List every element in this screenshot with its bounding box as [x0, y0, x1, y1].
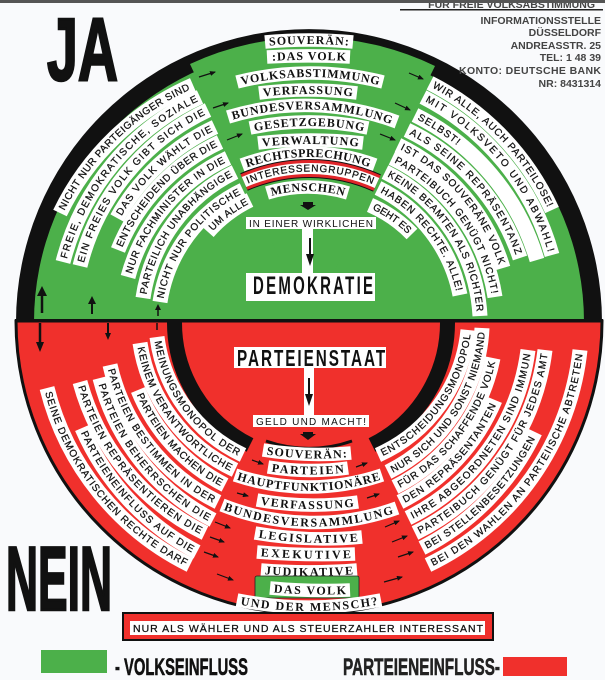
bands: green half right column: PARTEIBUCH GENÜGT NICHT!	[394, 156, 498, 294]
center stack: green half: VERWALTUNG	[262, 136, 358, 146]
arrows: red half side arrows	[204, 460, 413, 582]
center stack: green half: BUNDESVERSAMMLUNG	[231, 102, 392, 124]
arrow: white stem to Demokratie	[302, 229, 314, 273]
icon: small down marker red half	[300, 432, 316, 440]
bands: green half right column	[367, 76, 560, 316]
contact block top right: INFORMATIONSSTELLE	[480, 15, 601, 27]
arrows: green half side arrows	[199, 72, 423, 140]
bands: green half left column: ENTSCHEIDEND ÜBER DIE	[116, 140, 218, 247]
bands: red half left column: PARTEIEN REPRÄSENTIEREN DIE	[78, 385, 203, 534]
box: GELD UND MACHT: GELD UND MACHT!	[256, 417, 366, 428]
bands: green half left column: NUR FACHMINISTER IN DIE	[125, 156, 226, 274]
center stack: red half: BUNDESVERSAMMLUNG	[222, 500, 395, 530]
bands: red half right column: PARTEIBUCH GENÜGT FÜR JEDES AMT	[416, 353, 550, 536]
contact block top right: TEL: 1 48 39	[540, 52, 601, 64]
contact block top right: NR: 8431314	[539, 78, 601, 90]
center stack: green half: VERFASSUNG	[262, 86, 352, 96]
center stack: red half: JUDIKATIVE	[265, 563, 353, 579]
arrow: white stem to Geld und Macht	[304, 368, 314, 416]
bands: red half left column: SEINE DEMOKRATISCHEN RECHTE DARF	[46, 392, 188, 564]
center stack: red half	[220, 443, 400, 612]
icon: small down marker	[300, 202, 316, 210]
box: PARTEIENSTAAT: PARTEIENSTAAT	[237, 346, 385, 372]
center stack: red half: VERFASSUNG	[260, 494, 354, 512]
center stack: red half: DAS VOLK	[273, 581, 347, 598]
center stack: green half: RECHTSPRECHUNG	[244, 149, 370, 168]
contact block top right	[0, 0, 605, 90]
center stack: green half: :DAS VOLK	[272, 52, 346, 61]
bands: red half left column: PARTEIENEINFLUSS AUF DIE	[81, 430, 195, 552]
center stack: green half: INTERESSENGRUPPEN	[246, 164, 374, 184]
top half: black ring with green field	[16, 29, 602, 323]
poster: JA / NEIN democracy diagram: NEIN	[6, 529, 112, 630]
bands: green half right column: MIT VOLKSVETO UND ABWAHL!	[426, 96, 554, 252]
bands: red half left column: PARTEIEN BEHERRSCHEN DIE	[98, 383, 211, 521]
callout: nur als wähler: NUR ALS WÄHLER UND ALS STEUERZAHLER INTERESSANT	[133, 623, 484, 635]
center stack: red half: EXEKUTIVE	[260, 545, 351, 562]
center stack: green half: VOLKSABSTIMMUNG	[240, 69, 380, 84]
title: JA: JA	[47, 0, 118, 99]
center stack: green half: SOUVERÄN:	[270, 34, 348, 46]
bands: red half left column: MEINUNGSMONOPOL DER	[154, 340, 240, 456]
bands: red half right column	[375, 328, 588, 572]
bands: green half right column: WIR ALLE, AUCH PARTEILOSE!	[434, 81, 554, 207]
bands: green half right column: HABEN RECHTE. ALLE!	[380, 186, 463, 290]
contact block top right: DÜSSELDORF	[529, 26, 602, 39]
contact block top right: KONTO: DEUTSCHE BANK	[459, 65, 601, 77]
bands: red half left column	[40, 336, 246, 572]
bands: red half right column: DEN REPRÄSENTANTEN	[402, 402, 496, 503]
bands: green half left column: UM ALLE	[208, 198, 248, 230]
callout: nur als wähler	[123, 613, 493, 640]
bands: green half left column: NICHT NUR POLITISCHE	[156, 188, 241, 298]
bands: red half left column: PARTEIEN MACHEN DIE	[137, 392, 224, 486]
bands: green half left column	[53, 78, 254, 304]
center stack: green half: MENSCHEN	[270, 183, 346, 196]
center stack: red half: HAUPTFUNKTIONÄRE	[236, 469, 382, 494]
bands: green half left column: NICHT NUR PARTEIGÄNGER SIND	[58, 84, 189, 210]
bands: green half right column: KEINE BEAMTEN ALS RICHTER	[388, 170, 484, 312]
bottom half: red field with black outline	[15, 320, 603, 614]
bands: green half left column: DAS VOLK WÄHLT DIE	[116, 125, 213, 216]
bands: red half right column: NUR SICH UND SONST NIEMAND	[390, 332, 485, 473]
bands: red half right column: BEI DEN WAHLEN AN PARTEIISCHE ABTRETEN	[429, 353, 585, 568]
center stack: red half: PARTEIEN	[271, 461, 345, 478]
arrows: down arrows along the left of red half	[36, 323, 157, 352]
center stack: red half: SOUVERÄN:	[266, 444, 347, 461]
bands: green half right column: SELBST!	[418, 114, 461, 145]
bands: green half right column: ALS SEINE REPRÄSENTANZ	[409, 129, 522, 255]
bands: red half left column: KEINEM VERANTWORTLICHE	[138, 346, 233, 471]
legend: volkseinfluss	[41, 650, 248, 680]
inner black ring of the red half	[174, 322, 448, 448]
bands: red half right column: BEI STELLENBESETZUNGEN	[423, 435, 537, 551]
bands: red half right column: IHRE ABGEORDNETEN SIND IMMUN	[409, 353, 533, 521]
bands: green half left column: EIN FREIES VOLK GIBT SICH DIE	[77, 108, 206, 262]
bands: red half right column: FÜR DAS SCHAFFENDE VOLK	[397, 360, 496, 488]
center stack: red half: LEGISLATIVE	[258, 527, 358, 546]
bands: green half right column: IST DAS SOUVERÄNE VOLK	[400, 144, 506, 265]
center stack: green half: GESETZGEBUNG	[254, 118, 364, 131]
bands: green half right column: GEHT ES	[374, 204, 412, 233]
arrows: up arrows along the left of green half	[37, 286, 161, 316]
bands: green half left column: PARTEILICH UNABHÄNGIGE	[140, 170, 232, 294]
bands: red half left column: PARTEIEN BESTIMMEN IN DER	[108, 368, 215, 503]
box: in einer wirklichen: IN EINER WIRKLICHEN	[249, 219, 373, 230]
center stack: red half: UND DER MENSCH?	[240, 594, 378, 614]
contact block top right: ANDREASSTR. 25	[511, 40, 601, 52]
box: DEMOKRATIE: DEMOKRATIE	[253, 272, 373, 300]
bands: red half right column: ENTSCHEIDUNGSMONOPOL	[380, 334, 471, 456]
bands: green half left column: FREIE, DEMOKRATISCHE, SOZIALE	[60, 95, 198, 258]
center stack: green half	[226, 33, 400, 200]
